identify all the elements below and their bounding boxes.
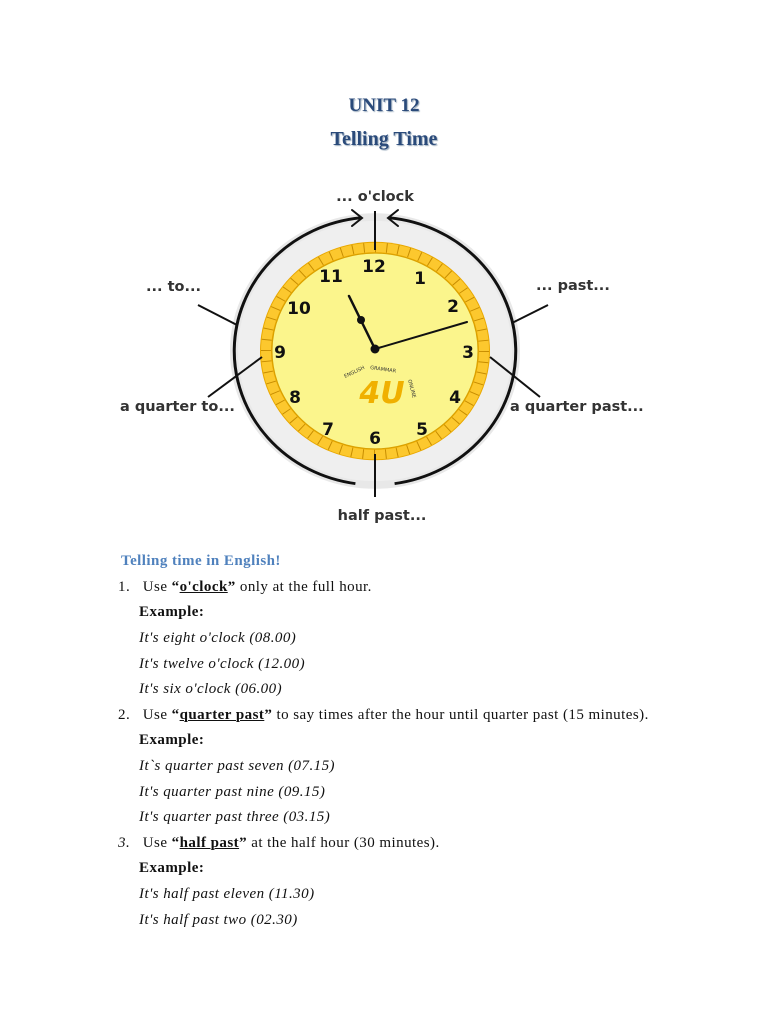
example 3 — [138, 860, 315, 928]
hour numbers: 8 — [289, 388, 301, 408]
hour numbers: 2 — [447, 297, 459, 317]
logo 4U — [343, 365, 417, 411]
rule 1: 1. Use “o'clock” only at the full hour. — [118, 579, 372, 595]
labels: a quarter to... — [120, 399, 235, 415]
clock hands — [349, 296, 467, 349]
example 2: It`s quarter past seven (07.15) — [139, 758, 335, 774]
labels: half past... — [338, 508, 426, 524]
labels: ... o'clock — [336, 189, 414, 205]
clock face — [272, 253, 478, 449]
section heading: Telling time in English! — [121, 553, 281, 569]
hour numbers: 9 — [274, 343, 286, 363]
logo 4U: ONLINE — [406, 379, 417, 399]
hour numbers: 7 — [322, 420, 334, 440]
hour numbers: 4 — [449, 388, 461, 408]
rule 3: 3. Use “half past” at the half hour (30 minutes). — [118, 835, 440, 851]
example 2: Example: — [139, 732, 204, 748]
labels: ... to... — [146, 279, 201, 295]
logo 4U: 4U — [358, 376, 405, 411]
hour numbers: 6 — [369, 429, 381, 449]
hour numbers: 12 — [362, 257, 386, 277]
arcs — [234, 218, 516, 484]
example 3: Example: — [139, 860, 204, 876]
hour numbers: 10 — [287, 299, 311, 319]
labels — [120, 189, 644, 524]
rule 2: 2. Use “quarter past” to say times after the hour until quarter past (15 minutes). — [118, 707, 649, 723]
hour numbers: 1 — [414, 269, 426, 289]
example 2: It's quarter past nine (09.15) — [139, 784, 325, 800]
clock ring — [260, 242, 490, 460]
hour numbers: 3 — [462, 343, 474, 363]
example 2: It's quarter past three (03.15) — [139, 809, 330, 825]
title: UNIT 12 — [349, 95, 419, 116]
hour numbers — [274, 257, 474, 449]
pointer lines — [198, 211, 548, 497]
labels: ... past... — [536, 278, 610, 294]
example 3: It's half past two (02.30) — [139, 912, 298, 928]
hour numbers: 5 — [416, 420, 428, 440]
example 3: It's half past eleven (11.30) — [139, 886, 315, 902]
clock diagram — [120, 189, 644, 524]
grey halo — [248, 230, 502, 472]
example 1: It's twelve o'clock (12.00) — [139, 656, 305, 672]
labels: a quarter past... — [510, 399, 644, 415]
hour numbers: 11 — [319, 267, 343, 287]
arrowheads — [352, 210, 398, 226]
example 1: It's eight o'clock (08.00) — [139, 630, 296, 646]
example 1 — [138, 604, 305, 697]
logo 4U: GRAMMAR — [370, 365, 397, 375]
example 2 — [138, 732, 335, 825]
logo 4U: ENGLISH — [343, 365, 366, 380]
subtitle: Telling Time — [331, 128, 437, 150]
example 1: It's six o'clock (06.00) — [139, 681, 282, 697]
example 1: Example: — [139, 604, 204, 620]
